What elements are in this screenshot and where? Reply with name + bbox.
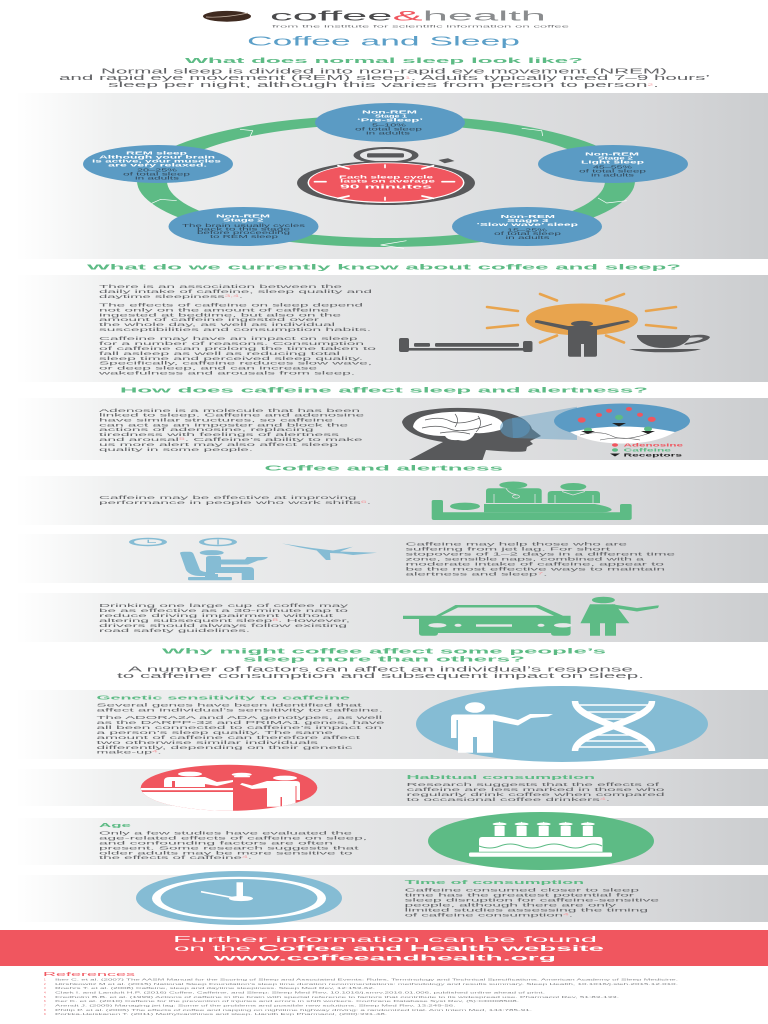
legend: Receptors [624, 452, 683, 457]
text block: sleep introduction [59, 68, 711, 89]
icon: woman with coffee [580, 597, 659, 636]
text block: genetics: all been connected to caffeine’s impact on [96, 725, 383, 731]
text block: jet lag: be the most effective ways to maintain [406, 567, 666, 573]
callout: further information banner [0, 930, 768, 966]
text block: time of consumption: limited studies assessing the timing [405, 908, 649, 914]
heading: current knowledge: What do we currently know about coffee and sleep? [87, 263, 682, 272]
text block: genetics: a person’s sleep quality. The same [96, 730, 334, 736]
text block: association: Caffeine may have an impact on sleep [99, 336, 358, 342]
heading: why individuals differ: sleep more than others? [243, 654, 526, 663]
text block: jet lag: stopovers of 1–2 days in a different time [406, 552, 676, 558]
text block: adenosine: tiredness with feelings of alertness [99, 432, 341, 438]
text block: association: sleep time and perceived sleep quality. [99, 356, 363, 362]
text block: age: the effects of caffeine 4 . [99, 855, 252, 861]
text block: association: The effects of caffeine on sleep depend [99, 303, 364, 309]
text block: age: and confounding factors are often [99, 841, 334, 847]
text block: driving: Drinking one large cup of coffee may [99, 603, 350, 609]
text block: association: amount of caffeine ingested over [99, 317, 320, 323]
text block: time of consumption: Time of consumption [405, 880, 586, 886]
stopwatch text: lasts on average [340, 179, 437, 184]
panel: habitual consumption [0, 765, 768, 812]
text block: driving [99, 603, 350, 634]
text block: age: present. Some research suggests that [99, 846, 360, 852]
stage: non-REM stage 2 light sleep [538, 145, 688, 183]
reference list: 4 [44, 990, 46, 994]
stage: REM sleep: in adults [135, 176, 179, 181]
reference list: Porkka-Heiskanen T. (2011) Methylxanthines and sleep. Handb Exp Pharmacol, (200):331-48. [55, 1012, 387, 1016]
plane [282, 544, 377, 560]
text block: age [99, 823, 367, 861]
icon: stopwatch [297, 147, 475, 205]
references [43, 972, 678, 1016]
stage: non-REM stage 1: in adults [366, 131, 410, 136]
text block: genetics: The ADORA2A and ADA genotypes, as well [96, 715, 382, 721]
reference list [44, 977, 678, 1016]
text block: sleep introduction: and rapid eye movement (REM) sleep 1 . Adults typically need 7–9 hours’ [59, 75, 711, 82]
text block: time of consumption: Caffeine consumed closer to sleep [405, 888, 640, 894]
text block: jet lag: moderate intake of caffeine, appear to [406, 562, 665, 568]
reference list: 6 [44, 999, 46, 1003]
heading: coffee and alertness: Coffee and alertness [264, 463, 503, 472]
stage: non-REM stage 1: 5–10% [372, 123, 407, 128]
text block: shift work: performance in people who work shifts 6 . [99, 500, 371, 506]
text block: adenosine: actions of adenosine, replacing [99, 427, 314, 433]
text block: driving: be as effective as a 30-minute nap to [99, 608, 349, 614]
stage: REM sleep: REM sleep [126, 151, 188, 156]
magnifying cone [500, 407, 577, 440]
text block: adenosine: can act as an imposter and block the [99, 423, 349, 429]
text block: driving: reduce driving impairment without [99, 613, 335, 619]
stage: non-REM stage 2 return: Stage 2 [223, 218, 265, 223]
text block: association: not only on the amount of caffeine [99, 308, 330, 314]
text block: adenosine: have similar structures, so caffeine [99, 418, 334, 424]
reference list: Arendt J. (2009) Managing jet lag: Some of the problems and possible new solutions. Sleep Med Rev, 13:249-56. [55, 1003, 456, 1007]
bed [399, 338, 532, 352]
text block: association: fall asleep as well as reducing total [99, 351, 340, 357]
sun [487, 294, 676, 342]
text block: habitual consumption: Habitual consumption [406, 775, 597, 781]
clock one [129, 538, 167, 546]
text block: genetics: make-up 4 . [96, 749, 162, 756]
panel: genetic sensitivity [0, 686, 768, 762]
panel: driving [0, 593, 768, 642]
legend [610, 443, 684, 457]
text block: genetics: amount of caffeine can therefore affect [96, 735, 362, 741]
stage: non-REM stage 3 slow wave: of total sleep [494, 231, 563, 236]
text block: time of consumption: time has the greatest potential for [405, 893, 635, 899]
icon: traveller with clocks and plane [129, 538, 377, 580]
icon: doctors and patient in bed [432, 482, 632, 520]
legend: Caffeine [624, 448, 673, 453]
text block: association: wakefulness and arousals from sleep. [99, 371, 355, 377]
text block: jet lag: alertness and sleep 7 . [406, 571, 548, 578]
text block: habitual consumption: regularly drink coffee when compared [406, 792, 665, 798]
text block: genetics [96, 695, 385, 756]
text block: driving: drivers should always follow existing [99, 623, 348, 629]
reference list: Roehrs T. et al. (2008) Caffeine, sleep and daytime sleepiness. Sleep Med Rev, 12:153-62. [55, 986, 375, 990]
text block: age: age-related effects of caffeine on sleep, [99, 836, 367, 842]
text block: sleep introduction: Normal sleep is divided into non-rapid eye movement (NREM) [101, 69, 667, 76]
icon: person and DNA [416, 686, 708, 762]
text block: time of consumption: of caffeine consumption 4 . [405, 912, 573, 919]
title: Coffee and Sleep [247, 34, 520, 49]
text block: association: ingested at bedtime, but also on the [99, 313, 342, 319]
seated person [180, 550, 268, 580]
text block: adenosine [99, 408, 365, 453]
stage: non-REM stage 3 slow wave [452, 207, 602, 246]
text block: age: Only a few studies have evaluated the [99, 831, 353, 837]
text block: habitual consumption: caffeine are less marked in those who [406, 787, 665, 793]
text block: association: There is an association between the [99, 284, 343, 290]
reference list: 2 [44, 982, 46, 986]
brain [413, 412, 503, 441]
stage: non-REM stage 3 slow wave: Stage 3 [507, 218, 550, 223]
stage: non-REM stage 3 slow wave: 15–25% [507, 228, 548, 233]
heading: caffeine effects: How does caffeine affect sleep and alertness? [120, 386, 649, 395]
text block: factors introduction: A number of factors can affect an individual’s response [128, 667, 633, 674]
stage: non-REM stage 1: Non-REM [362, 110, 418, 115]
text block: shift work [99, 495, 371, 506]
text block: sleep introduction: sleep per night, although this varies from person to person 2 . [108, 82, 659, 89]
coffee cup [629, 335, 710, 352]
text block: factors introduction [117, 666, 644, 680]
stage: REM sleep: is active, your muscles [92, 159, 223, 164]
stage: non-REM stage 1: Stage 1 [375, 114, 408, 119]
reference list: 7 [44, 1003, 46, 1007]
stopwatch text [339, 174, 437, 190]
stage: REM sleep [83, 145, 233, 183]
panel: current knowledge [0, 275, 768, 382]
panel: caffeine mechanism [0, 398, 768, 460]
text block: association: for a number of reasons. Consumption [99, 341, 365, 347]
text block: jet lag: zone, sensible naps, combined with a [406, 557, 645, 563]
text block: adenosine: us more alert may also affect sleep [99, 442, 339, 448]
text block: driving: altering subsequent sleep 8 . However, [99, 617, 350, 624]
stage: non-REM stage 3 slow wave: ‘Slow wave’ sleep [476, 222, 579, 227]
text block: habitual consumption [406, 775, 665, 803]
reference list: 5 [44, 995, 46, 999]
text block: age: older adults may be more sensitive to [99, 851, 353, 857]
icon: head with brain and receptors [402, 404, 690, 460]
stage: non-REM stage 2 return: back to this stage [197, 227, 292, 232]
text block: association: or deep sleep, and can increase [99, 366, 318, 372]
stage: non-REM stage 1: ‘Pre-sleep’ [357, 118, 423, 123]
cycle ring [137, 115, 635, 248]
reference list: Clark I. and Landolt H.P. (2016) Coffee, Caffeine, and Sleep: Sleep Med Rev, 10.1016/j.smrv.2016.01.006, published online ahead of print. [55, 990, 545, 994]
panel: age [0, 812, 768, 870]
logo wordmark: coffee & health [270, 9, 546, 24]
text block: association: of caffeine can prolong the time taken to [99, 346, 377, 352]
text block: shift work: Caffeine may be effective at improving [99, 495, 357, 501]
reference list: Hirshkowitz M et al. (2015) National Sleep Foundation’s sleep time duration recommendations: methodology and results summary. Sleep Health, 10.1016/j.sleh.2015.12.010. [55, 982, 678, 986]
stage: REM sleep: Although your brain [99, 155, 216, 160]
panel: time of consumption [0, 871, 768, 925]
reference list: 9 [44, 1012, 46, 1016]
receptor close-up [554, 404, 690, 444]
callout: further information banner: on the Coffee and Health website [174, 944, 606, 953]
panel: shift work [0, 476, 768, 525]
text block: habitual consumption: Research suggests that the effects of [406, 782, 661, 788]
stage: non-REM stage 3 slow wave: in adults [506, 235, 550, 240]
stage: non-REM stage 2 return: The brain usually cycles [182, 223, 305, 228]
stage: non-REM stage 2 light sleep: Stage 2 [598, 156, 635, 161]
text block: association: daytime sleepiness 3,4 . [99, 293, 243, 300]
text block: genetics: Several genes have been identified that [96, 703, 363, 709]
stopwatch text: 90 minutes [340, 184, 432, 190]
text block: adenosine: linked to sleep. Caffeine and adenosine [99, 413, 365, 419]
text block: jet lag: Caffeine may help those who are [406, 542, 628, 548]
text block: adenosine: Adenosine is a molecule that has been [99, 408, 361, 414]
reference list: 3 [44, 986, 46, 990]
text block: jet lag: suffering from jet lag. For short [406, 547, 612, 553]
text block: adenosine: quality in some people. [99, 447, 253, 453]
stage: REM sleep: of total sleep [123, 172, 192, 177]
panel: sleep cycle [0, 93, 768, 259]
stage: non-REM stage 2 light sleep: Light sleep [581, 160, 645, 165]
stage: non-REM stage 1: of total sleep [355, 127, 424, 132]
stage: non-REM stage 2 return: Non-REM [216, 214, 271, 219]
text block: association: the whole day, as well as individual [99, 322, 335, 328]
reference list: Fredholm B.B. et al. (1999) Actions of caffeine in the brain with special reference to factors that contribute to its widespread use. Pharmacol Rev, 51:83-133. [55, 995, 619, 999]
heading: why individuals differ: Why might coffee affect some people’s [162, 646, 606, 655]
text block: association: daily intake of caffeine, sleep quality and [99, 289, 373, 295]
text block: genetics: affect an individual’s sensitivity to caffeine. [96, 708, 383, 714]
stage: non-REM stage 2 return: before proceeding [197, 230, 292, 235]
stopwatch text: Each sleep cycle [339, 175, 435, 180]
reference list: 1 [44, 977, 46, 981]
text block: factors introduction: to caffeine consumption and subsequent impact on sleep. [117, 673, 644, 680]
text block: genetics: as the DARPP-32 and PRIMA1 genes, have [96, 720, 385, 726]
panel: jet lag [0, 534, 768, 583]
stage: non-REM stage 2 return [168, 207, 318, 246]
text block: age: Age [99, 823, 131, 829]
text block: driving: road safety guidelines. [99, 628, 250, 634]
text block: adenosine: and arousal 5 . Caffeine’s ability to make [99, 437, 363, 443]
heading: why individuals differ [162, 646, 606, 663]
stage: non-REM stage 2 light sleep: of total sleep [579, 169, 648, 174]
reference list: Ker K. et al. (2010) Caffeine for the prevention of injuries and errors in shift workers. Cochrane Database Syst Rev, (5):CD008508. [55, 999, 519, 1003]
icon: car [403, 605, 572, 636]
reference list: Iber C. et al. (2007) The AASM Manual for the Scoring of Sleep and Associated Events: Rules, Terminology and Technical Specifications. American Academy of Sleep Medicine. [55, 977, 678, 981]
text block: association: Specifically, caffeine reduces slow wave, [99, 361, 372, 367]
references heading: References [43, 972, 136, 978]
callout: further information banner: Further information can be found [173, 935, 597, 944]
stage: non-REM stage 3 slow wave: Non-REM [500, 214, 556, 219]
clock two [199, 538, 237, 546]
stage: non-REM stage 2 light sleep: Non-REM [585, 152, 640, 157]
stage: non-REM stage 2 return: to REM sleep [210, 234, 280, 239]
legend: Adenosine [624, 443, 684, 448]
text block: time of consumption [405, 880, 660, 918]
icon: person awake between bed and coffee [399, 294, 710, 357]
heading: normal sleep: What does normal sleep look like? [185, 56, 584, 65]
stage: non-REM stage 1 [315, 103, 465, 142]
text block: association [99, 284, 377, 376]
person [535, 320, 630, 357]
icon: people at coffee counter [141, 765, 317, 812]
icon: coffee bean [203, 11, 251, 22]
reference list: 8 [44, 1008, 46, 1012]
text block: time of consumption: sleep disruption for caffeine-sensitive [405, 898, 660, 904]
stage: REM sleep: are very relaxed. [108, 163, 207, 168]
reference list: Philip P. et al. (2006) The effects of coffee and napping on nighttime highway driving: a randomized trial. Ann Intern Med, 144:785-91. [55, 1008, 532, 1012]
logo: coffee and health [203, 9, 572, 29]
text block: association: susceptibilities and consumption habits. [99, 327, 371, 333]
text block: genetics: Genetic sensitivity to caffeine [96, 695, 350, 701]
stage: non-REM stage 2 light sleep: in adults [591, 173, 634, 178]
text block: genetics: two otherwise similar individuals [96, 740, 320, 746]
icon: clock [136, 871, 342, 925]
icon: birthday cake [428, 812, 654, 870]
logo tagline: from the institute for scientific information on coffee [272, 24, 572, 29]
text block: genetics: differently, depending on their genetic [96, 745, 354, 751]
stage: non-REM stage 2 light sleep: 45–55% [593, 165, 633, 170]
text block: time of consumption: people, although there are only [405, 903, 618, 909]
text block: jet lag [406, 542, 676, 578]
text block: habitual consumption: to occasional coffee drinkers 4 . [406, 797, 610, 803]
callout: further information banner: www.coffeeandhealth.org [210, 954, 556, 963]
stage: REM sleep: 20–25% [137, 168, 178, 173]
